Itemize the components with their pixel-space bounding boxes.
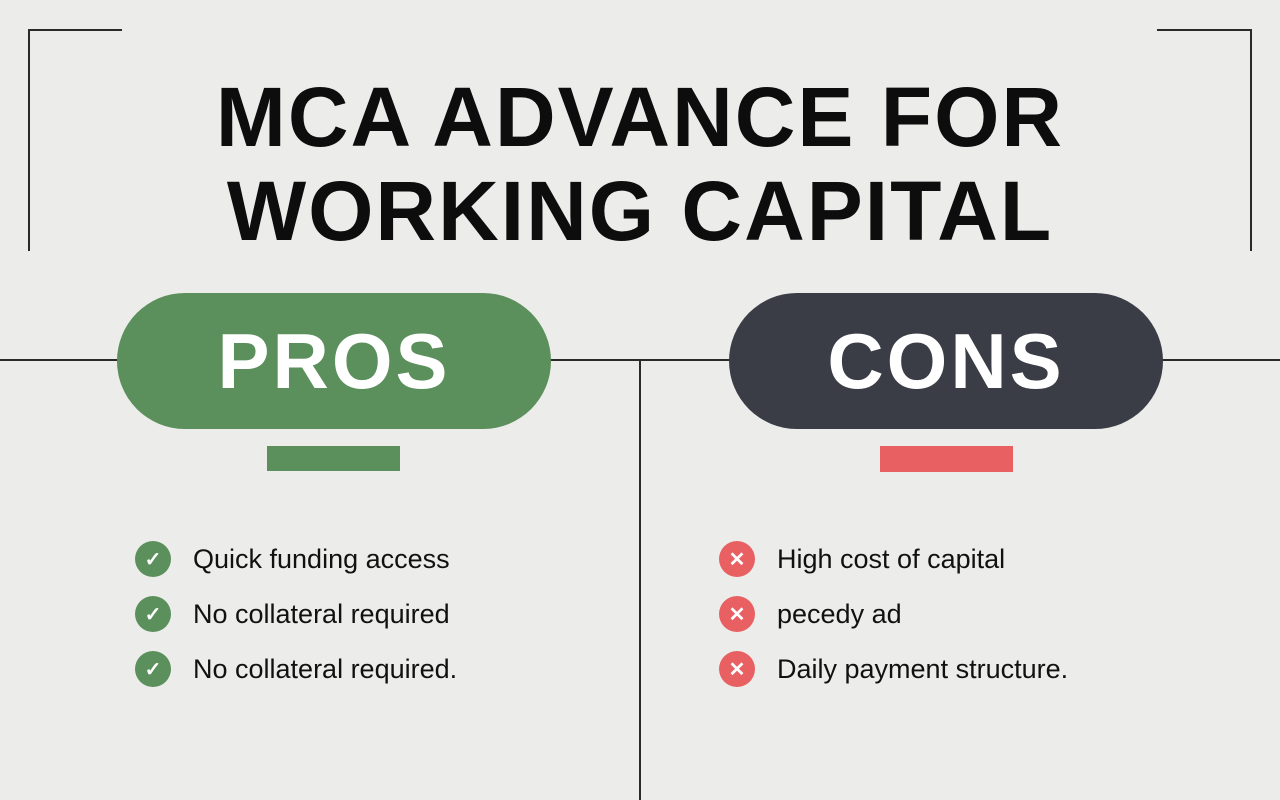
- pro item 2: No collateral required: [193, 598, 450, 628]
- con item 3: [719, 651, 1068, 687]
- con item 1: ✕: [729, 548, 745, 570]
- pro item 3: ✓: [145, 658, 161, 680]
- pro item 1: [135, 541, 450, 577]
- pro item 3: No collateral required.: [193, 654, 457, 684]
- title: [216, 70, 1064, 258]
- cons pill: CONS: [827, 317, 1065, 405]
- title: MCA ADVANCE FOR: [216, 70, 1064, 164]
- con item 1: High cost of capital: [777, 544, 1005, 574]
- pro item 1: ✓: [145, 548, 161, 570]
- pros pill: [117, 293, 551, 429]
- pro item 3: [135, 651, 457, 687]
- con item 2: [719, 596, 902, 632]
- con item 1: [719, 541, 1005, 577]
- title: WORKING CAPITAL: [227, 164, 1053, 258]
- con item 3: Daily payment structure.: [777, 654, 1068, 684]
- cons list: [719, 541, 1068, 687]
- pros accent bar: [267, 446, 400, 471]
- cons pill: [729, 293, 1163, 429]
- pro item 1: Quick funding access: [193, 544, 450, 574]
- con item 2: pecedy ad: [777, 598, 902, 628]
- pros list: [135, 541, 457, 687]
- pros pill: PROS: [217, 317, 451, 405]
- cons accent bar: [880, 446, 1013, 472]
- con item 2: ✕: [729, 604, 745, 626]
- con item 3: ✕: [729, 658, 745, 680]
- pro item 2: ✓: [145, 604, 161, 626]
- pro item 2: [135, 596, 450, 632]
